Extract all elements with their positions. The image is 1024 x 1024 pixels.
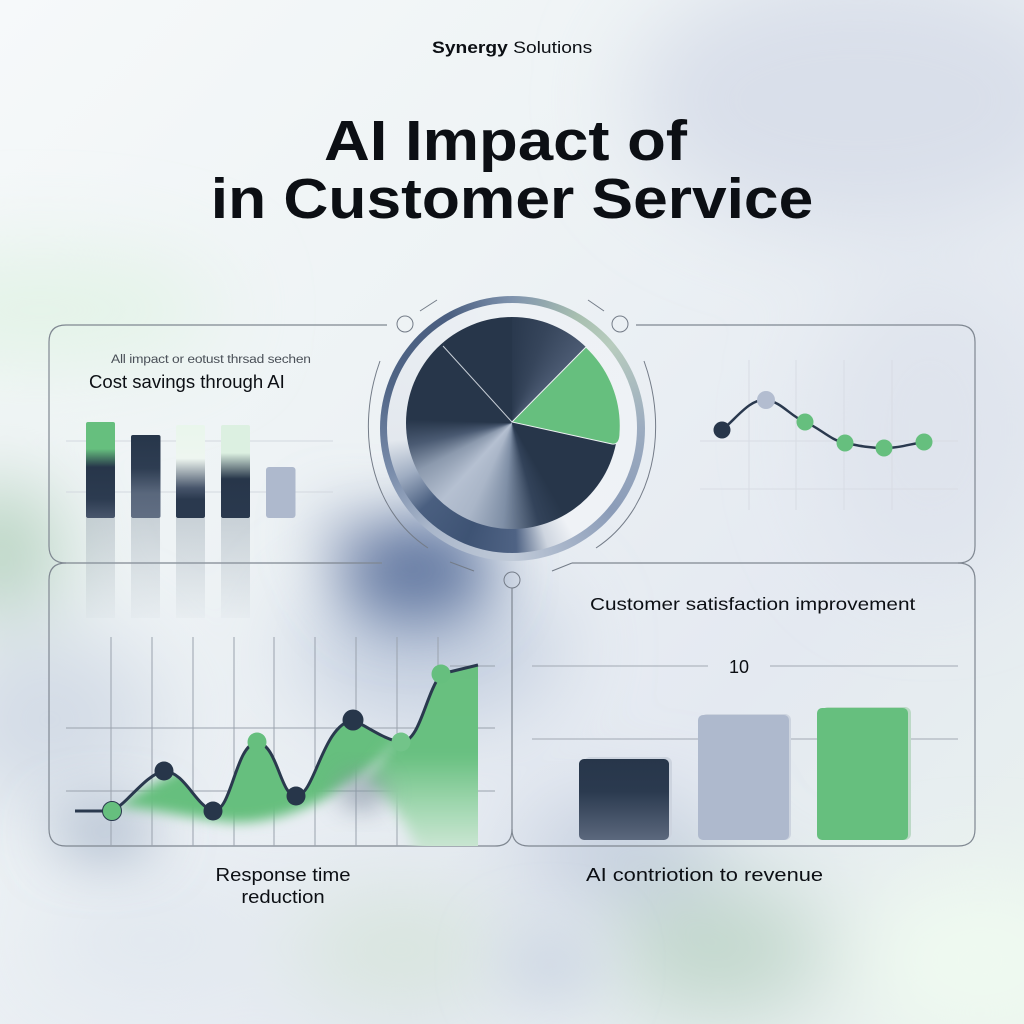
caption: response time: reduction xyxy=(241,887,325,907)
bar chart xyxy=(532,666,958,840)
caption: response time: Response time xyxy=(215,865,351,885)
pie sector lines and green slice xyxy=(442,346,620,445)
title: in Customer Service xyxy=(211,167,813,231)
axis value: 10 xyxy=(729,657,749,677)
panel heading: Cost savings through AI xyxy=(89,372,285,392)
center dial xyxy=(380,296,645,561)
small caption: All impact or eotust thrsad sechen xyxy=(111,354,311,366)
caption: response time xyxy=(215,865,351,907)
brand name: Synergy Solutions xyxy=(432,38,592,57)
panel heading: Customer satisfaction improvement xyxy=(590,594,915,614)
panel: cost savings xyxy=(66,354,333,606)
pie base xyxy=(406,317,618,529)
title xyxy=(211,109,813,231)
dial outer ring xyxy=(380,296,645,561)
caption: revenue: AI contriotion to revenue xyxy=(586,865,823,885)
dial inner plate xyxy=(387,303,637,553)
bar chart xyxy=(66,422,333,606)
panel: customer satisfaction xyxy=(532,594,958,840)
line chart response time xyxy=(66,637,495,846)
title: AI Impact of xyxy=(324,109,687,173)
